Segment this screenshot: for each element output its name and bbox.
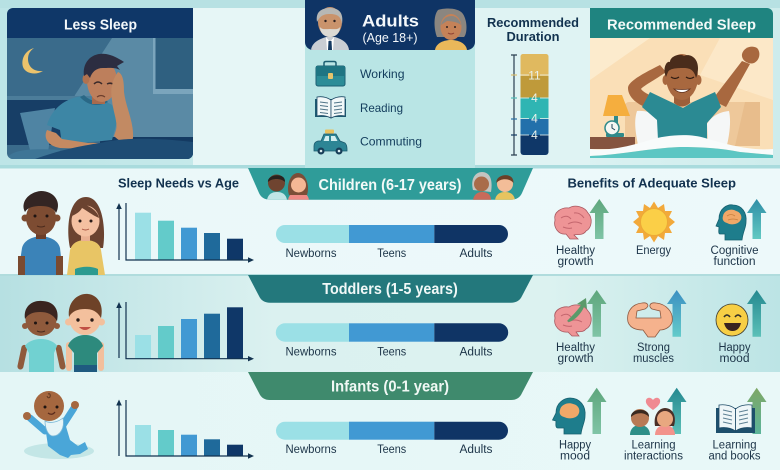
raised arm xyxy=(716,61,750,107)
bar chart: toddlers xyxy=(116,302,254,361)
benefits: children xyxy=(555,199,766,268)
stacked bar: children xyxy=(276,225,508,260)
blanket xyxy=(35,139,193,159)
illustration: toddlers xyxy=(17,294,105,372)
label: mood xyxy=(720,353,750,365)
stacked bar: children: Teens xyxy=(377,248,406,260)
stacked bar: toddlers: Teens xyxy=(377,346,406,358)
value labels: 4 xyxy=(531,112,538,126)
label: Strong xyxy=(637,342,670,354)
label: Learning xyxy=(712,440,756,452)
heading: less sleep: Less Sleep xyxy=(64,16,137,34)
label xyxy=(708,440,761,462)
heading: toddlers: Toddlers (1-5 years) xyxy=(322,281,458,298)
label: Learning xyxy=(632,440,676,452)
heading: recommended sleep: Recommended Sleep xyxy=(607,16,756,34)
head xyxy=(666,54,698,100)
benefits: infants xyxy=(552,388,766,462)
head xyxy=(92,96,105,104)
label: mood xyxy=(560,450,590,462)
stacked bar: children: Newborns xyxy=(286,248,337,260)
stacked bar: infants: Newborns xyxy=(286,444,337,456)
value labels: 4 xyxy=(531,91,538,105)
arrow: up teal xyxy=(667,388,686,434)
portrait: older man xyxy=(311,7,349,50)
icon: head with brain xyxy=(552,398,585,434)
pillows xyxy=(635,110,658,144)
benefits: toddlers xyxy=(555,290,766,365)
ribbon: children xyxy=(248,168,533,200)
bar chart: infants xyxy=(116,400,254,459)
panel: adults xyxy=(305,0,475,168)
label: and books xyxy=(708,450,761,462)
icon: taxi xyxy=(314,130,347,154)
heading: recommended duration: Recommended xyxy=(487,15,579,30)
heading: adults: Adults xyxy=(362,12,419,30)
ribbon: infants xyxy=(248,372,533,400)
lamp and clock xyxy=(603,95,630,116)
section heading: sleep needs vs age: Sleep Needs vs Age xyxy=(118,176,239,190)
label: commuting: Commuting xyxy=(360,134,422,148)
label: Healthy xyxy=(556,342,595,354)
label: interactions xyxy=(624,450,683,462)
arrow: up teal xyxy=(747,290,766,337)
blanket xyxy=(590,135,773,156)
label: growth xyxy=(558,256,594,268)
ribbon: toddlers xyxy=(248,275,533,303)
label: Cognitive xyxy=(710,245,758,257)
icon: head with brain xyxy=(716,205,746,240)
label xyxy=(624,440,683,462)
icon: sun xyxy=(633,202,675,242)
label: muscles xyxy=(633,353,674,365)
stacked bar: children: Adults xyxy=(460,248,493,260)
label: working: Working xyxy=(360,67,404,81)
arrow: up green xyxy=(590,199,609,239)
arrow: up blue xyxy=(667,290,686,337)
illustration: man stretching in bed xyxy=(590,38,773,158)
stacked bar: toddlers: Adults xyxy=(460,346,493,358)
label: function xyxy=(714,256,756,268)
stacked bar: infants: Teens xyxy=(377,444,406,456)
stacked bar: infants: Adults xyxy=(460,444,493,456)
icon: open book xyxy=(315,97,346,118)
stacked bar: toddlers: Newborns xyxy=(286,346,337,358)
bent arm xyxy=(628,65,666,107)
toddler boy two xyxy=(65,294,105,372)
torso xyxy=(47,96,118,145)
illustration: children xyxy=(18,191,105,275)
label: reading: Reading xyxy=(360,101,403,115)
stacked bar: infants xyxy=(276,422,508,456)
heading: recommended duration: Duration xyxy=(506,29,560,44)
arm on head xyxy=(111,72,133,143)
section heading: benefits: Benefits of Adequate Sleep xyxy=(568,176,736,190)
stacked bar: toddlers xyxy=(276,323,508,358)
bar chart: children xyxy=(116,203,254,263)
small portraits xyxy=(267,172,515,200)
arrow: up green xyxy=(587,290,606,337)
label: Energy xyxy=(636,245,671,257)
value labels: 4 xyxy=(531,128,538,142)
icon: smiley xyxy=(716,304,748,336)
subheading: age: (Age 18+) xyxy=(362,31,418,45)
label xyxy=(556,245,595,268)
label: growth xyxy=(558,353,594,365)
panel: recommended sleep xyxy=(590,8,773,158)
heading: recommended duration xyxy=(487,15,579,44)
torso xyxy=(642,92,721,140)
portrait: older woman xyxy=(434,9,467,50)
icon: brain xyxy=(555,206,591,239)
label: Healthy xyxy=(556,245,595,257)
icon: brain with arrow xyxy=(555,298,591,336)
arrow: up green xyxy=(587,388,606,434)
boy xyxy=(18,191,63,275)
label xyxy=(559,440,591,462)
label xyxy=(718,342,751,365)
top section background xyxy=(0,0,780,168)
label xyxy=(710,245,758,268)
toddler boy one xyxy=(17,301,66,372)
label xyxy=(556,342,595,365)
label xyxy=(633,342,674,365)
panel: less sleep xyxy=(7,8,193,159)
icon: flexed muscles xyxy=(628,303,672,337)
label: Happy xyxy=(559,440,591,452)
illustration: baby xyxy=(23,391,94,459)
arrow: up teal xyxy=(747,199,766,239)
illustration: tired man in bed at night xyxy=(7,38,193,159)
moon xyxy=(22,48,43,74)
value labels xyxy=(528,68,541,142)
value labels: 11 xyxy=(528,68,541,82)
heading: infants: Infants (0-1 year) xyxy=(331,378,449,396)
icon: two children with heart xyxy=(630,398,675,435)
icon: briefcase xyxy=(316,62,345,86)
icon: open book xyxy=(716,405,755,433)
arrow: up olive xyxy=(747,388,766,434)
girl xyxy=(67,197,105,275)
label: Happy xyxy=(718,342,751,354)
chart: recommended duration stacked bar xyxy=(511,54,550,155)
heading: children: Children (6-17 years) xyxy=(318,177,462,194)
